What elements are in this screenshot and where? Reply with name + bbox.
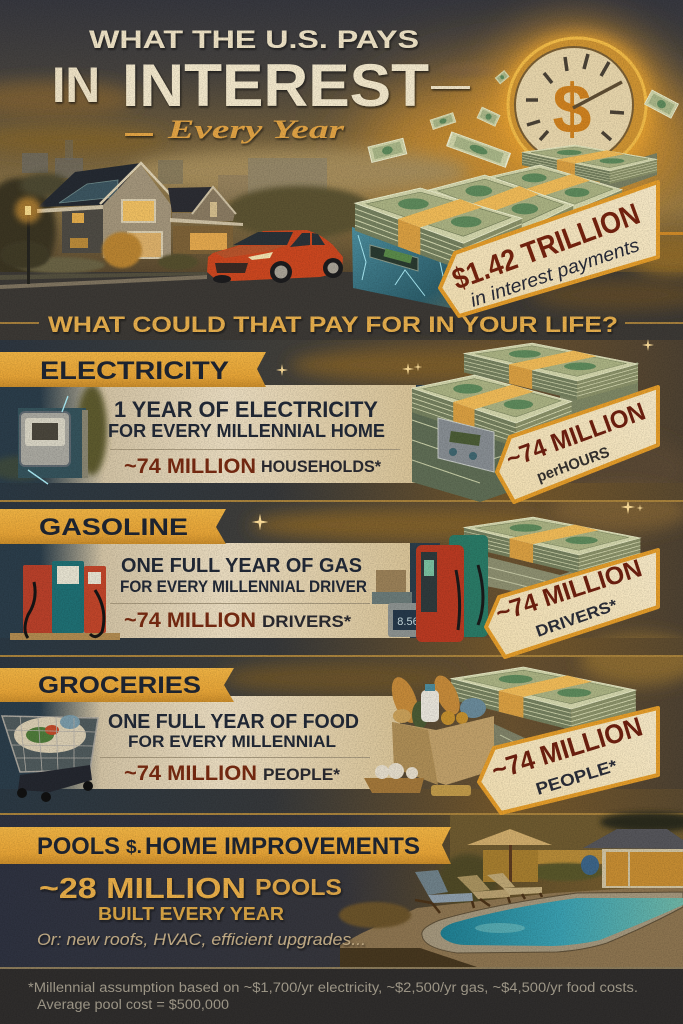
title: Every Year	[166, 115, 345, 144]
groceries text	[108, 711, 359, 785]
pools text: Or: new roofs, HVAC, efficient upgrades...	[37, 930, 366, 949]
icon: dollar clock	[504, 33, 652, 177]
pools ribbon: HOME IMPROVEMENTS	[145, 833, 420, 860]
groceries text: ONE FULL YEAR OF FOOD	[108, 711, 359, 733]
gasoline text	[120, 555, 367, 632]
flying money	[368, 70, 678, 167]
section: pools	[0, 812, 683, 968]
icon: electric meter	[0, 385, 107, 484]
callout: 74 million drivers: ~74 MILLION	[492, 554, 645, 628]
section: groceries	[0, 667, 683, 815]
pools text: BUILT EVERY YEAR	[98, 904, 284, 924]
groceries ribbon	[0, 668, 234, 702]
callout: 1.42 trillion: $1.42 TRILLION	[448, 198, 644, 297]
money stack: electricity	[412, 343, 638, 502]
icon: gas pumps right: 8.56	[397, 616, 419, 628]
money stack: gasoline	[464, 517, 640, 600]
subheading: WHAT COULD THAT PAY FOR IN YOUR LIFE?	[48, 312, 618, 337]
callout: 1.42 trillion: in interest payments	[468, 235, 643, 312]
title: IN	[52, 57, 100, 113]
gasoline text: DRIVERS*	[262, 612, 351, 631]
electricity text: HOUSEHOLDS*	[261, 457, 381, 476]
pools ribbon: $.	[126, 837, 142, 857]
gasoline text: ONE FULL YEAR OF GAS	[121, 555, 362, 577]
pools text: ~28 MILLION	[39, 873, 246, 905]
footnote: Average pool cost = $500,000	[37, 997, 229, 1012]
callout: 74 million electricity: perHOURS	[535, 444, 612, 486]
icon: gas pumps left	[10, 561, 120, 640]
electricity ribbon: ELECTRICITY	[40, 357, 229, 385]
pools ribbon: POOLS	[37, 833, 120, 860]
callout: 74 million electricity	[497, 387, 658, 502]
gasoline panel	[0, 543, 683, 657]
icon: gas pumps right	[372, 535, 488, 642]
house	[0, 163, 243, 273]
section: gasoline	[0, 509, 683, 657]
pool scene	[0, 812, 683, 968]
section: electricity	[0, 343, 683, 502]
title: INTEREST	[122, 52, 429, 119]
car	[207, 230, 343, 283]
hero background	[0, 0, 683, 340]
icon: shopping cart	[2, 715, 98, 802]
pools text	[37, 873, 366, 949]
footnote	[0, 967, 683, 1024]
mid background	[0, 339, 683, 820]
icon: street lamp	[15, 197, 41, 284]
gasoline text: ~74 MILLION	[124, 609, 256, 632]
title	[52, 26, 470, 144]
callout: 74 million drivers	[486, 550, 658, 657]
electricity ribbon	[0, 352, 266, 387]
callout: 74 million people: ~74 MILLION	[488, 711, 646, 786]
icon: grocery bag	[364, 672, 494, 796]
pools text: POOLS	[255, 874, 342, 900]
electricity text: FOR EVERY MILLENNIAL HOME	[108, 421, 385, 441]
money stack: groceries	[451, 667, 636, 775]
groceries ribbon: GROCERIES	[38, 672, 201, 699]
gasoline ribbon	[0, 509, 226, 544]
groceries text: FOR EVERY MILLENNIAL	[128, 732, 336, 751]
callout: 74 million people: PEOPLE*	[534, 756, 620, 799]
electricity panel	[0, 385, 683, 502]
callout: 74 million drivers: DRIVERS*	[534, 597, 620, 641]
pools ribbon	[0, 827, 451, 864]
electricity text	[108, 397, 385, 478]
gasoline text: FOR EVERY MILLENNIAL DRIVER	[120, 577, 367, 596]
groceries panel	[0, 696, 683, 815]
footnote: *Millennial assumption based on ~$1,700/yr electricity, ~$2,500/yr gas, ~$4,500/yr food costs.	[28, 980, 638, 995]
electricity text: 1 YEAR OF ELECTRICITY	[114, 397, 378, 422]
electricity text: ~74 MILLION	[124, 455, 256, 478]
icon: dollar clock: $	[553, 70, 591, 148]
groceries text: ~74 MILLION	[124, 762, 257, 785]
title: WHAT THE U.S. PAYS	[89, 26, 419, 54]
money stack: hero	[352, 145, 657, 310]
callout: 74 million electricity: ~74 MILLION	[502, 397, 649, 474]
callout: 74 million people	[479, 708, 658, 813]
groceries text: PEOPLE*	[263, 765, 340, 784]
gasoline ribbon: GASOLINE	[39, 514, 188, 541]
